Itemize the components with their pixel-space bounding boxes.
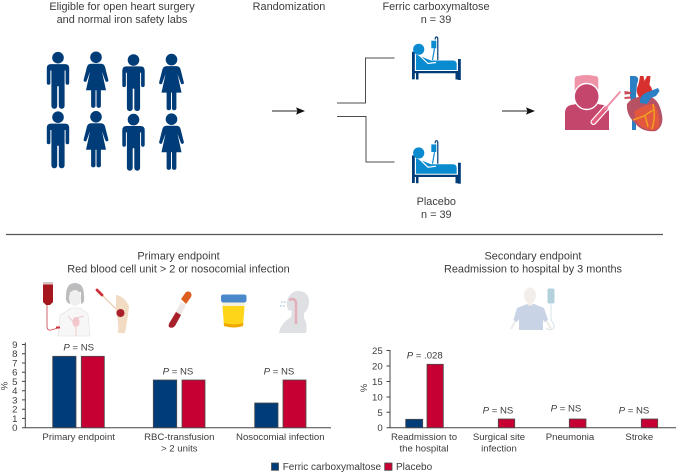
legend	[272, 462, 433, 472]
heading: secondary endpoint: Secondary endpoint	[485, 251, 581, 263]
arrow: to surgery	[502, 107, 535, 115]
bars: nosocomial infection	[255, 380, 306, 428]
heading: randomization: Randomization	[253, 1, 325, 13]
p values: P = NS	[163, 367, 193, 378]
bars: RBC transfusion	[153, 380, 205, 428]
heading: primary endpoint: Red blood cell unit > 2 or nosocomial infection	[67, 264, 290, 276]
icon: wound swab on arm	[97, 290, 129, 333]
y axis labels: 10	[372, 392, 383, 404]
y axis labels: 20	[372, 362, 383, 372]
p values: P = .028	[407, 350, 443, 361]
y axis labels	[12, 340, 18, 434]
p values: P = NS	[619, 405, 649, 416]
heading: eligibility: Eligible for open heart surgery	[49, 1, 195, 13]
y axis labels: 5	[12, 377, 18, 388]
icon: placebo patient in bed	[412, 141, 461, 184]
heading: placebo arm: Placebo	[417, 196, 456, 208]
category labels	[42, 432, 325, 455]
category labels: the hospital	[399, 444, 449, 455]
category labels: RBC-transfusion	[144, 432, 214, 443]
p values: P = NS	[63, 343, 94, 354]
arrow: to randomization	[272, 107, 305, 115]
y axis labels: 9	[12, 340, 18, 351]
y axis labels: 15	[372, 377, 383, 388]
icon: readmitted patient with IV	[511, 288, 554, 330]
icon: anatomical heart	[624, 76, 662, 131]
icon: respiratory tract head	[279, 291, 309, 333]
y axis labels: 25	[372, 346, 383, 357]
p values	[63, 343, 294, 378]
divider	[6, 234, 663, 236]
category labels: Stroke	[625, 432, 653, 443]
randomization bracket	[337, 58, 394, 162]
y axis labels: 4	[12, 386, 18, 397]
category labels: Surgical site	[473, 432, 525, 443]
y axis labels: 6	[12, 368, 18, 379]
p values: P = NS	[483, 405, 513, 416]
y axis title: %	[359, 383, 370, 392]
heading: primary endpoint: Primary endpoint	[137, 251, 220, 263]
bars: readmission	[406, 364, 443, 428]
p values: P = NS	[551, 404, 581, 415]
icon group: patients	[47, 52, 184, 171]
icon: blood test tube	[169, 292, 192, 328]
icon: urine cup	[221, 294, 246, 328]
category labels: Pneumonia	[546, 432, 595, 443]
y axis labels: 2	[12, 405, 18, 416]
heading: ferric carboxymaltose arm: n = 39	[421, 14, 451, 26]
heading: placebo arm: n = 39	[421, 209, 452, 221]
category labels	[391, 432, 653, 455]
y axis labels	[372, 346, 383, 434]
y axis labels: 7	[12, 358, 18, 370]
bar chart: secondary endpoint	[359, 346, 676, 455]
bar chart: primary endpoint	[0, 340, 331, 455]
y axis labels: 5	[377, 408, 383, 419]
bar: surgical site infection	[498, 419, 515, 428]
category labels: infection	[481, 444, 517, 455]
y axis labels: 3	[12, 395, 18, 406]
icon: blood transfusion patient	[43, 282, 90, 336]
category labels: Primary endpoint	[42, 432, 115, 443]
heading: eligibility: and normal iron safety labs	[57, 14, 188, 26]
bar: pneumonia	[569, 419, 586, 428]
bar: stroke	[641, 419, 658, 428]
icon: treatment patient in bed	[412, 37, 461, 80]
heading: ferric carboxymaltose arm: Ferric carboxymaltose	[382, 1, 490, 13]
category labels: Nosocomial infection	[236, 432, 325, 443]
category labels: Readmission to	[391, 432, 457, 443]
icon: surgeon	[565, 75, 620, 130]
bars: primary endpoint	[53, 356, 104, 428]
p values	[407, 350, 649, 416]
y axis labels: 0	[377, 423, 383, 434]
category labels: > 2 units	[161, 444, 198, 455]
p values: P = NS	[264, 367, 294, 378]
y axis labels: 1	[12, 414, 18, 425]
heading: secondary endpoint: Readmission to hospital by 3 months	[444, 264, 623, 276]
y axis labels: 8	[12, 349, 18, 360]
y axis labels: 0	[12, 423, 18, 434]
